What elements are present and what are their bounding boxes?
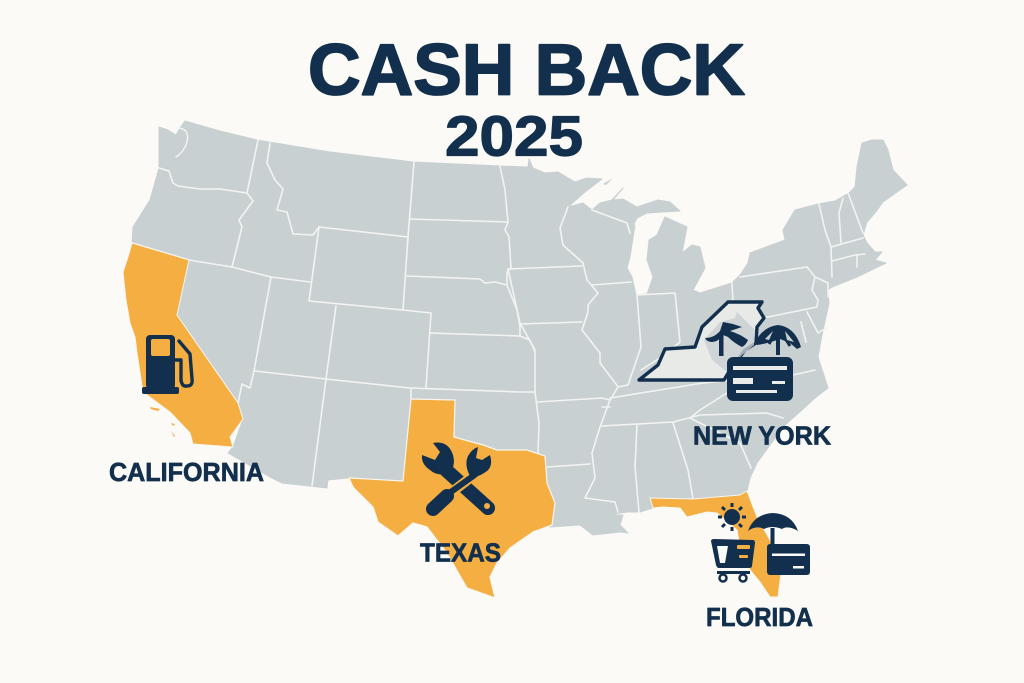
state borders	[132, 128, 865, 512]
icon: wrench and screwdriver	[422, 442, 491, 509]
state: Texas	[349, 399, 555, 598]
label: Texas: TEXAS	[420, 538, 501, 568]
gray land mass	[132, 121, 907, 535]
map: United States	[123, 121, 907, 598]
icon: sun	[718, 503, 746, 531]
title: CASH BACK	[308, 30, 745, 110]
title: 2025	[445, 104, 583, 168]
label: California: CALIFORNIA	[109, 457, 264, 487]
icon: credit card	[727, 357, 793, 401]
icon: Florida umbrella and card	[748, 513, 810, 575]
icon: beach umbrella	[755, 325, 801, 355]
state: Florida	[650, 491, 781, 597]
icon: shopping cart	[711, 539, 755, 582]
state: California	[123, 243, 243, 447]
title	[308, 30, 745, 168]
icon: palm tree	[705, 322, 748, 356]
label: New York: NEW YORK	[693, 420, 831, 450]
label: Florida: FLORIDA	[706, 602, 813, 632]
icon: fuel pump	[142, 335, 192, 394]
icon: New York outline	[639, 302, 801, 401]
